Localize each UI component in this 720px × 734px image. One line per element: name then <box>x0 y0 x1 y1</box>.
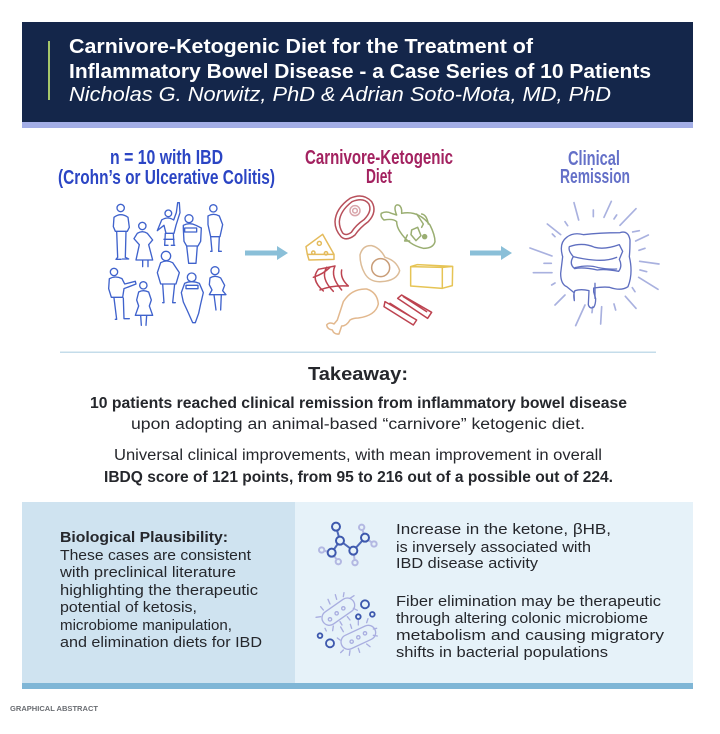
panel: biological plausibility: with preclinical literature <box>59 565 236 581</box>
takeaway text: upon adopting an animal-based “carnivore” ketogenic diet. <box>131 416 585 433</box>
arrow: patients to diet <box>245 246 288 260</box>
arrow: diet to remission <box>470 246 512 260</box>
heading: diet: Carnivore-Ketogenic <box>305 147 453 169</box>
icon: steak <box>335 196 374 239</box>
fiber text: metabolism and causing migratory <box>396 628 665 644</box>
heading: diet <box>305 147 453 188</box>
icon: cheese <box>306 234 334 260</box>
heading: patients <box>58 147 275 189</box>
heading: diet: Diet <box>366 166 392 188</box>
footer label: GRAPHICAL ABSTRACT <box>10 706 99 713</box>
panel: biological plausibility <box>22 502 295 683</box>
takeaway text: 10 patients reached clinical remission from inflammatory bowel disease <box>90 395 627 412</box>
ketone text: is inversely associated with <box>396 540 591 556</box>
authors: Nicholas G. Norwitz, PhD & Adrian Soto-Mota, MD, PhD <box>69 84 611 106</box>
bottom band <box>22 683 693 689</box>
icon: ketone molecule <box>319 523 377 565</box>
icon: chicken drumstick <box>327 289 378 334</box>
panel: biological plausibility: and elimination diets for IBD <box>60 635 262 651</box>
fiber text: through altering colonic microbiome <box>396 611 648 627</box>
header banner <box>22 22 693 128</box>
takeaway text: IBDQ score of 121 points, from 95 to 216 out of a possible out of 224. <box>104 469 613 486</box>
ketone text: Increase in the ketone, βHB, <box>396 522 611 538</box>
panel: mechanisms <box>295 502 693 683</box>
icon: fried egg <box>360 246 400 282</box>
heading: patients: n = 10 with IBD <box>110 147 223 169</box>
icon: ribs <box>313 266 348 291</box>
heading: remission: Remission <box>560 166 630 188</box>
takeaway text <box>90 395 627 486</box>
heading: takeaway: Takeaway: <box>308 364 408 384</box>
divider <box>60 352 656 353</box>
ketone text <box>396 522 611 572</box>
icon: bacon <box>384 295 432 325</box>
heading: remission <box>560 148 630 188</box>
panel: biological plausibility: highlighting the therapeutic <box>60 583 258 599</box>
panel: biological plausibility: microbiome manipulation, <box>60 618 232 634</box>
title <box>69 36 651 83</box>
icon: fish <box>381 205 435 248</box>
fiber text <box>396 594 665 661</box>
icon: group of ten people <box>109 203 226 325</box>
title: Inflammatory Bowel Disease - a Case Series of 10 Patients <box>69 61 651 83</box>
icon: intestine with radiating lines <box>530 201 659 326</box>
icon: butter <box>411 265 453 288</box>
icon: bacteria <box>316 593 378 655</box>
panel: biological plausibility: These cases are consistent <box>60 548 251 564</box>
heading: remission: Clinical <box>568 148 620 170</box>
fiber text: shifts in bacterial populations <box>396 645 608 661</box>
heading: patients: (Crohn’s or Ulcerative Colitis) <box>58 167 275 189</box>
fiber text: Fiber elimination may be therapeutic <box>396 594 661 610</box>
panel: biological plausibility: Biological Plausibility: <box>60 530 228 546</box>
icons: food group <box>306 196 453 334</box>
title: Carnivore-Ketogenic Diet for the Treatment of <box>69 36 533 58</box>
takeaway text: Universal clinical improvements, with mean improvement in overall <box>114 447 602 464</box>
panel: biological plausibility: potential of ketosis, <box>60 600 197 616</box>
ketone text: IBD disease activity <box>396 556 539 572</box>
